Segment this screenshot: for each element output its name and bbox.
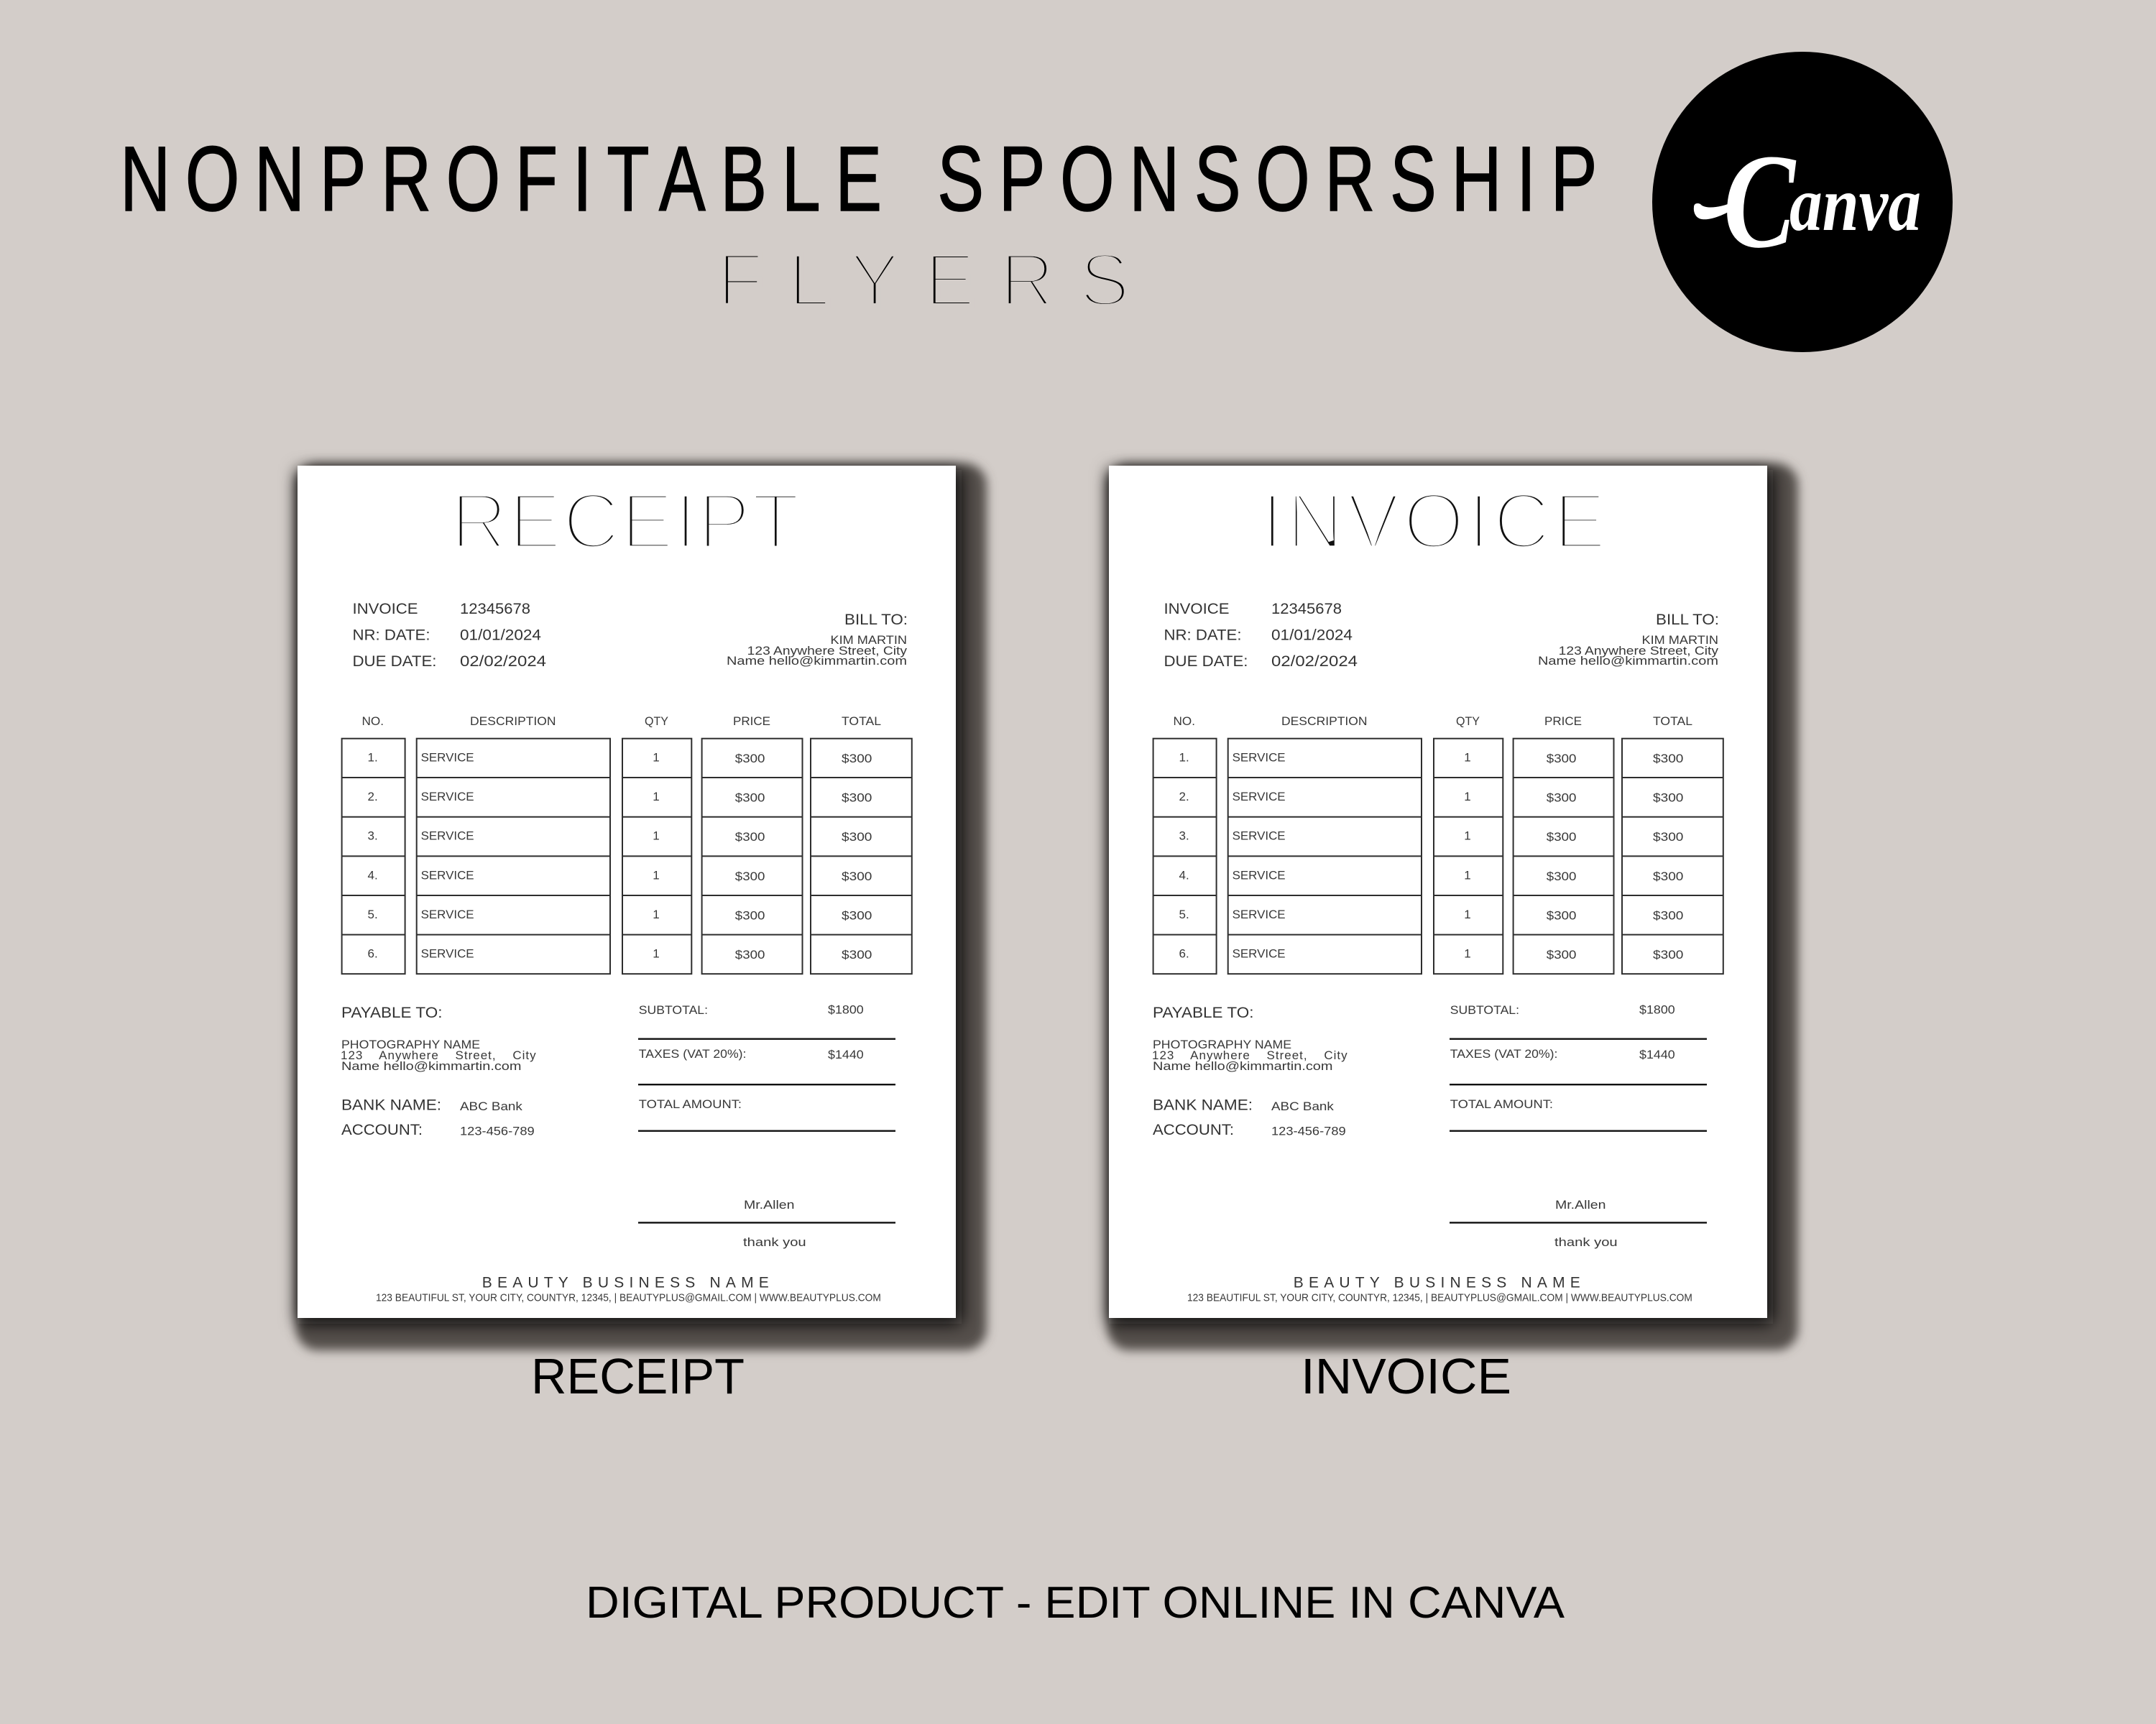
table rows: 3.	[1179, 829, 1189, 843]
table rows: 5.	[1179, 908, 1189, 921]
table rows: 1	[1464, 868, 1471, 882]
caption: receipt: RECEIPT	[531, 1348, 745, 1404]
table rows: $300	[735, 790, 765, 805]
table header: NO.	[1173, 714, 1195, 728]
text block: bank details: ABC Bank	[1271, 1100, 1334, 1113]
table rows: 1	[1464, 947, 1471, 960]
table rows: $300	[1653, 752, 1683, 765]
signature block	[1450, 1198, 1707, 1249]
text block: document details: 01/01/2024	[1271, 627, 1353, 644]
totals block	[1450, 1003, 1707, 1132]
table header: TOTAL	[1653, 714, 1692, 728]
text block: bill to: Name hello@kimmartin.com	[727, 654, 907, 668]
table rows: SERVICE	[1233, 947, 1286, 960]
table grid	[342, 739, 912, 974]
heading: invoice: INVOICE	[1261, 477, 1606, 566]
signature block: Mr.Allen	[1555, 1198, 1606, 1212]
text block: document details: INVOICE	[1164, 601, 1229, 617]
signature block	[638, 1198, 895, 1249]
table rows: 1	[1464, 829, 1471, 843]
text block: bank details: ACCOUNT:	[341, 1122, 423, 1138]
table rows: $300	[1547, 870, 1576, 883]
table rows: $300	[1653, 948, 1683, 962]
totals block: TOTAL AMOUNT:	[1450, 1097, 1553, 1111]
title: NONPROFITABLE SPONSORSHIP	[120, 128, 1612, 231]
footer: business name and address: BEAUTY BUSINESS NAME	[482, 1275, 769, 1291]
table rows: 1	[653, 750, 660, 765]
table rows: SERVICE	[421, 790, 474, 803]
table header	[1173, 714, 1692, 728]
table header: QTY	[645, 714, 668, 728]
text block: payable to: PHOTOGRAPHY NAME	[1153, 1038, 1291, 1051]
table rows: 2.	[368, 790, 378, 803]
table rows: $300	[735, 830, 765, 844]
totals block: TOTAL AMOUNT:	[639, 1097, 742, 1111]
text block: bank details: ACCOUNT:	[1153, 1122, 1234, 1138]
table rows: 1	[653, 908, 660, 921]
text block: document details: 12345678	[1271, 601, 1342, 617]
badge: Canva: C	[1723, 126, 1797, 276]
signature block: thank you	[1554, 1235, 1618, 1249]
table rows: $300	[1547, 830, 1576, 844]
totals block: TAXES (VAT 20%):	[1450, 1047, 1557, 1061]
table rows: $300	[1547, 790, 1576, 805]
table rows: 1	[1464, 790, 1471, 803]
table rows: $300	[842, 752, 872, 765]
table rows: SERVICE	[421, 908, 474, 921]
totals block: $1800	[828, 1003, 864, 1016]
table rows: $300	[842, 870, 872, 883]
text block: bank details: ABC Bank	[460, 1100, 522, 1113]
table rows: SERVICE	[421, 750, 474, 765]
table rows: 1	[653, 790, 660, 803]
text block: bill to: Name hello@kimmartin.com	[1538, 654, 1718, 668]
text block: document details	[352, 601, 546, 670]
text block: document details: DUE DATE:	[1164, 653, 1248, 670]
text block: bank details: 123-456-789	[1271, 1125, 1346, 1138]
text block: document details: INVOICE	[352, 601, 418, 617]
text block: document details: 12345678	[460, 601, 530, 617]
table rows: $300	[735, 948, 765, 962]
text block: payable to: Name hello@kimmartin.com	[341, 1059, 522, 1073]
table rows: 1	[1464, 908, 1471, 921]
text block: payable to: 123 Anywhere Street, City	[341, 1048, 536, 1062]
text block: bill to	[727, 612, 908, 668]
table rows: 5.	[368, 908, 378, 921]
footer: business name and address: BEAUTY BUSINESS NAME	[1294, 1275, 1580, 1291]
table rows: SERVICE	[421, 829, 474, 843]
text block: payable to: 123 Anywhere Street, City	[1152, 1048, 1348, 1062]
totals block: $1440	[828, 1048, 864, 1061]
totals block	[638, 1003, 895, 1132]
text block: bill to: 123 Anywhere Street, City	[747, 644, 908, 658]
text block: bank details	[1153, 1097, 1346, 1138]
table rows: 1	[653, 947, 660, 960]
text block: payable to: PHOTOGRAPHY NAME	[341, 1038, 480, 1051]
table rows: $300	[735, 908, 765, 923]
table rows: 1	[653, 868, 660, 882]
table rows: 1.	[368, 750, 378, 765]
table rows: $300	[842, 790, 872, 805]
table rows: $300	[1653, 908, 1683, 923]
table rows: 2.	[1179, 790, 1189, 803]
text block: bill to: KIM MARTIN	[1641, 633, 1718, 647]
table rows: SERVICE	[1233, 908, 1286, 921]
table header: PRICE	[733, 714, 770, 728]
text block: document details: 02/02/2024	[460, 653, 546, 670]
table rows: SERVICE	[1233, 868, 1286, 882]
table rows: $300	[842, 830, 872, 844]
text block: document details: 01/01/2024	[460, 627, 541, 644]
table rows	[1179, 750, 1683, 962]
table header: PRICE	[1544, 714, 1582, 728]
footer: business name and address: 123 BEAUTIFUL ST, YOUR CITY, COUNTYR, 12345, | BEAUTYPLUS@GMAIL.COM | WWW.BEAUTYPLUS.COM	[1187, 1292, 1692, 1304]
text block: document details: DUE DATE:	[352, 653, 437, 670]
table rows: $300	[1547, 948, 1576, 962]
footer: business name and address: 123 BEAUTIFUL ST, YOUR CITY, COUNTYR, 12345, | BEAUTYPLUS@GMAIL.COM | WWW.BEAUTYPLUS.COM	[376, 1292, 881, 1304]
text block: document details	[1164, 601, 1358, 670]
table rows: $300	[1653, 870, 1683, 883]
text block: bank details: 123-456-789	[460, 1125, 535, 1138]
table rows: $300	[842, 908, 872, 923]
table grid	[1153, 739, 1723, 974]
text block: bill to	[1538, 612, 1719, 668]
totals block: SUBTOTAL:	[639, 1003, 708, 1017]
totals block: TAXES (VAT 20%):	[639, 1047, 746, 1061]
text block: payable to: Name hello@kimmartin.com	[1153, 1059, 1332, 1073]
table rows: 4.	[368, 868, 378, 882]
table rows: 1	[1464, 750, 1471, 765]
text block: document details: NR: DATE:	[1164, 627, 1242, 644]
subtitle: FLYERS	[717, 239, 1130, 322]
text block: bank details: BANK NAME:	[341, 1097, 441, 1114]
tagline: DIGITAL PRODUCT - EDIT ONLINE IN CANVA	[586, 1578, 1565, 1628]
table header	[362, 714, 881, 728]
signature block: Mr.Allen	[744, 1198, 795, 1212]
text block: bill to: KIM MARTIN	[831, 633, 907, 647]
table rows: $300	[1653, 830, 1683, 844]
table rows: $300	[1547, 752, 1576, 765]
text block: payable to	[1152, 1005, 1348, 1073]
table rows	[368, 750, 872, 962]
table header: NO.	[362, 714, 384, 728]
table rows: 4.	[1179, 868, 1189, 882]
text block: payable to: PAYABLE TO:	[1153, 1005, 1253, 1021]
table rows: SERVICE	[1233, 750, 1286, 765]
signature block: thank you	[743, 1235, 806, 1249]
table rows: 1	[653, 829, 660, 843]
table header: DESCRIPTION	[470, 714, 556, 728]
totals block: $1440	[1639, 1048, 1675, 1061]
table rows: $300	[1653, 790, 1683, 805]
table header: QTY	[1456, 714, 1480, 728]
table rows: $300	[842, 948, 872, 962]
badge: Canva: anva	[1789, 162, 1921, 247]
table rows: $300	[735, 870, 765, 883]
table header: TOTAL	[842, 714, 881, 728]
footer: business name and address	[1187, 1275, 1692, 1304]
text block: bank details: BANK NAME:	[1153, 1097, 1253, 1114]
heading: receipt: RECEIPT	[451, 477, 800, 566]
text block: document details: NR: DATE:	[352, 627, 430, 644]
totals block: $1800	[1639, 1003, 1675, 1016]
panel: receipt card	[296, 464, 987, 1350]
text block: payable to: PAYABLE TO:	[341, 1005, 443, 1021]
text block: document details: 02/02/2024	[1271, 653, 1358, 670]
table header: DESCRIPTION	[1281, 714, 1367, 728]
table rows: SERVICE	[421, 868, 474, 882]
badge: Canva	[1652, 52, 1953, 352]
caption: invoice: INVOICE	[1301, 1348, 1511, 1404]
table rows: 6.	[368, 947, 378, 960]
panel: invoice card	[1107, 464, 1798, 1350]
text block: bill to: BILL TO:	[844, 612, 908, 628]
table rows: SERVICE	[1233, 790, 1286, 803]
table rows: $300	[1547, 908, 1576, 923]
table rows: 3.	[368, 829, 378, 843]
totals block: SUBTOTAL:	[1450, 1003, 1519, 1017]
text block: payable to	[341, 1005, 536, 1073]
text block: bill to: BILL TO:	[1656, 612, 1719, 628]
text block: bill to: 123 Anywhere Street, City	[1559, 644, 1719, 658]
text block: bank details	[341, 1097, 535, 1138]
footer: business name and address	[376, 1275, 881, 1304]
table rows: SERVICE	[421, 947, 474, 960]
table rows: 1.	[1179, 750, 1189, 765]
table rows: SERVICE	[1233, 829, 1286, 843]
table rows: 6.	[1179, 947, 1189, 960]
table rows: $300	[735, 752, 765, 765]
